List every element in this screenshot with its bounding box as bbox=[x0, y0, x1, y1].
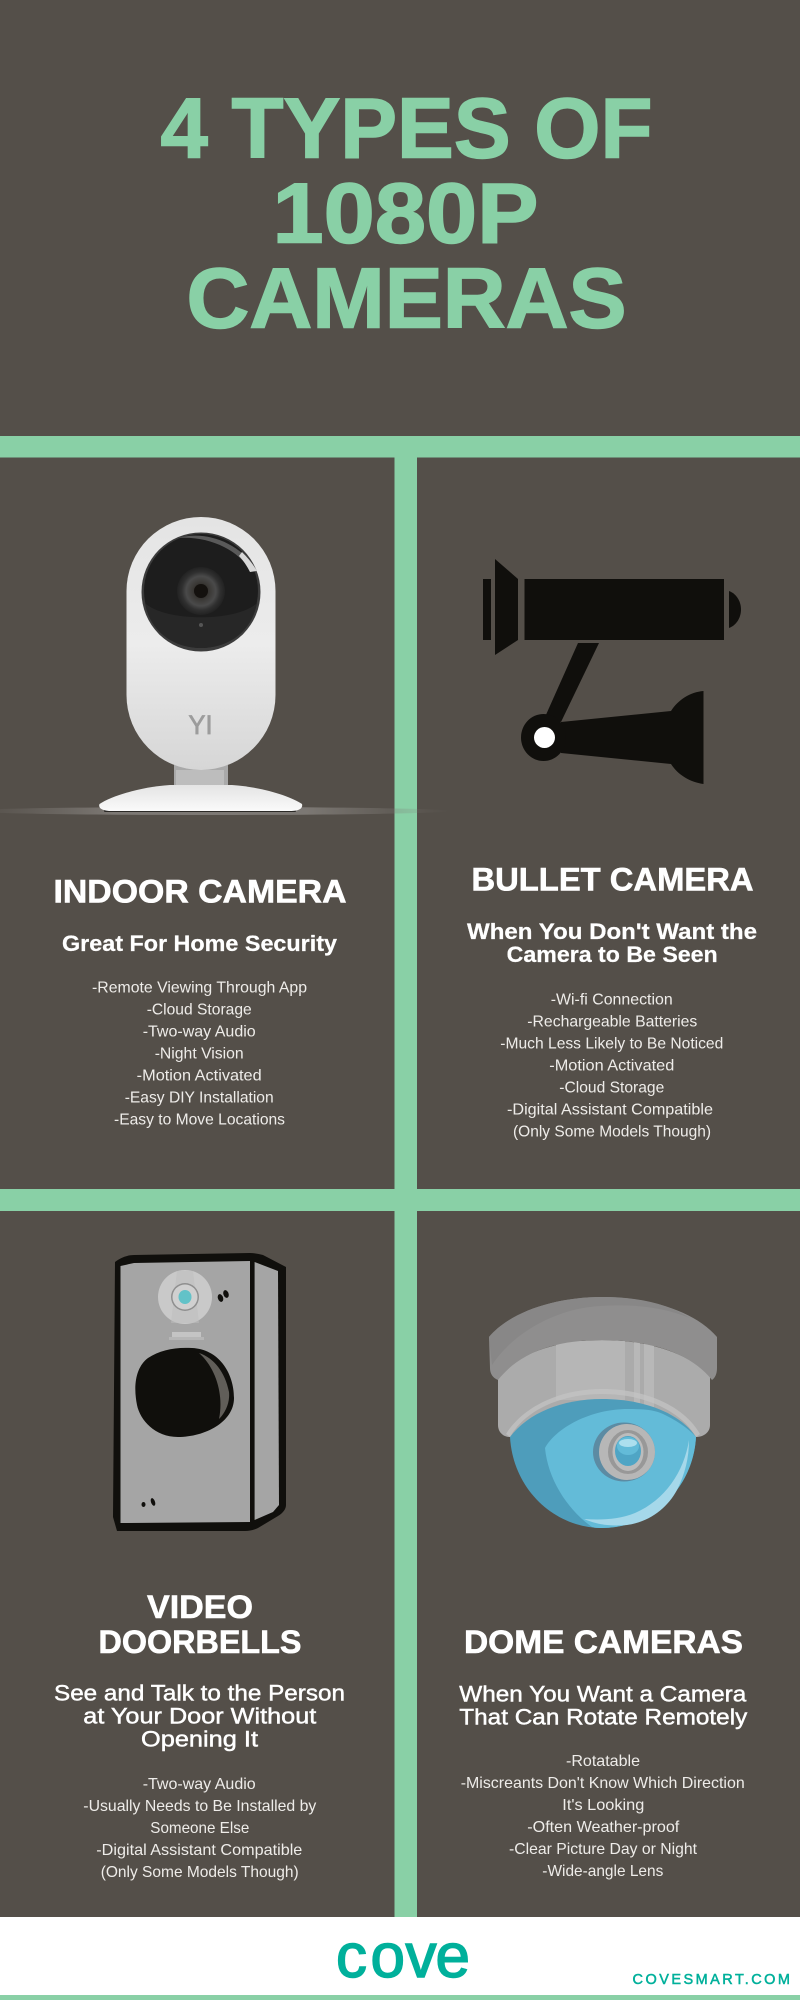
feature list: dome cameras: -Wide-angle Lens bbox=[542, 1863, 663, 1880]
icon: dome camera bbox=[489, 1297, 717, 1528]
subheading: bullet camera: When You Don't Want the bbox=[467, 919, 757, 944]
subheading: bullet camera: Camera to Be Seen bbox=[507, 942, 718, 967]
subheading: video doorbells: at Your Door Without bbox=[83, 1704, 316, 1728]
feature list: indoor camera: -Cloud Storage bbox=[147, 1002, 252, 1018]
feature list: dome cameras: -Clear Picture Day or Night bbox=[509, 1841, 698, 1858]
feature list: indoor camera: -Night Vision bbox=[155, 1046, 244, 1062]
heading: dome cameras: DOME CAMERAS bbox=[464, 1624, 743, 1660]
feature list: dome cameras: -Often Weather-proof bbox=[527, 1819, 680, 1836]
subheading: bullet camera bbox=[467, 919, 757, 967]
feature list: video doorbells: -Digital Assistant Compatible bbox=[96, 1842, 302, 1859]
subheading: video doorbells bbox=[54, 1680, 345, 1752]
icon: video doorbell bbox=[113, 1253, 286, 1531]
feature list: indoor camera: -Easy to Move Locations bbox=[114, 1112, 285, 1128]
feature list: dome cameras bbox=[461, 1753, 745, 1880]
heading: bullet camera: BULLET CAMERA bbox=[472, 862, 754, 898]
feature list: bullet camera: (Only Some Models Though) bbox=[513, 1124, 711, 1140]
subheading: dome cameras: When You Want a Camera bbox=[459, 1682, 747, 1706]
feature list: bullet camera: -Digital Assistant Compatible bbox=[507, 1102, 713, 1118]
logo: YI: YI bbox=[188, 710, 212, 740]
subheading: dome cameras: That Can Rotate Remotely bbox=[459, 1704, 747, 1730]
feature list: dome cameras: -Miscreants Don't Know Which Direction bbox=[461, 1775, 745, 1792]
feature list: video doorbells: -Two-way Audio bbox=[143, 1776, 256, 1793]
title: 4 TYPES OF bbox=[160, 82, 652, 176]
feature list: video doorbells: Someone Else bbox=[150, 1820, 249, 1837]
panel: footer bbox=[0, 1917, 800, 2000]
feature list: dome cameras: -Rotatable bbox=[566, 1753, 640, 1770]
subheading: dome cameras bbox=[459, 1682, 747, 1730]
feature list: video doorbells: (Only Some Models Though) bbox=[101, 1864, 299, 1881]
feature list: bullet camera: -Much Less Likely to Be Noticed bbox=[500, 1036, 723, 1052]
feature list: indoor camera: -Easy DIY Installation bbox=[125, 1090, 274, 1106]
feature list: video doorbells bbox=[83, 1776, 316, 1881]
subheading: video doorbells: See and Talk to the Person bbox=[54, 1680, 345, 1706]
heading: video doorbells: VIDEO bbox=[147, 1589, 253, 1625]
panel: indoor camera bbox=[0, 517, 450, 1128]
panel: video doorbells bbox=[54, 1253, 345, 1881]
feature list: bullet camera: -Cloud Storage bbox=[559, 1080, 664, 1096]
panel: bullet camera bbox=[467, 559, 757, 1140]
feature list: bullet camera: -Rechargeable Batteries bbox=[527, 1014, 697, 1030]
heading: video doorbells bbox=[98, 1589, 302, 1660]
logo: cove: cove bbox=[336, 1922, 470, 1991]
subheading: video doorbells: Opening It bbox=[141, 1726, 258, 1752]
title bbox=[160, 82, 652, 346]
feature list: bullet camera: -Motion Activated bbox=[549, 1058, 674, 1074]
feature list: indoor camera bbox=[92, 980, 307, 1128]
subheading: indoor camera: Great For Home Security bbox=[62, 931, 338, 956]
feature list: video doorbells: -Usually Needs to Be Installed by bbox=[83, 1798, 316, 1815]
heading: indoor camera: INDOOR CAMERA bbox=[54, 874, 346, 910]
icon: bullet camera bbox=[483, 559, 741, 784]
feature list: indoor camera: -Two-way Audio bbox=[143, 1024, 256, 1040]
feature list: bullet camera: -Wi-fi Connection bbox=[551, 992, 673, 1008]
icon: indoor camera bbox=[0, 517, 450, 815]
feature list: indoor camera: -Remote Viewing Through App bbox=[92, 980, 307, 996]
website url: COVESMART.COM bbox=[632, 1972, 790, 1988]
heading: video doorbells: DOORBELLS bbox=[98, 1624, 302, 1660]
title: CAMERAS bbox=[186, 252, 626, 346]
title: 1080P bbox=[272, 166, 538, 262]
feature list: indoor camera: -Motion Activated bbox=[137, 1068, 262, 1084]
feature list: bullet camera bbox=[500, 992, 723, 1140]
feature list: dome cameras: It's Looking bbox=[562, 1797, 644, 1814]
panel: dome cameras bbox=[459, 1297, 747, 1880]
